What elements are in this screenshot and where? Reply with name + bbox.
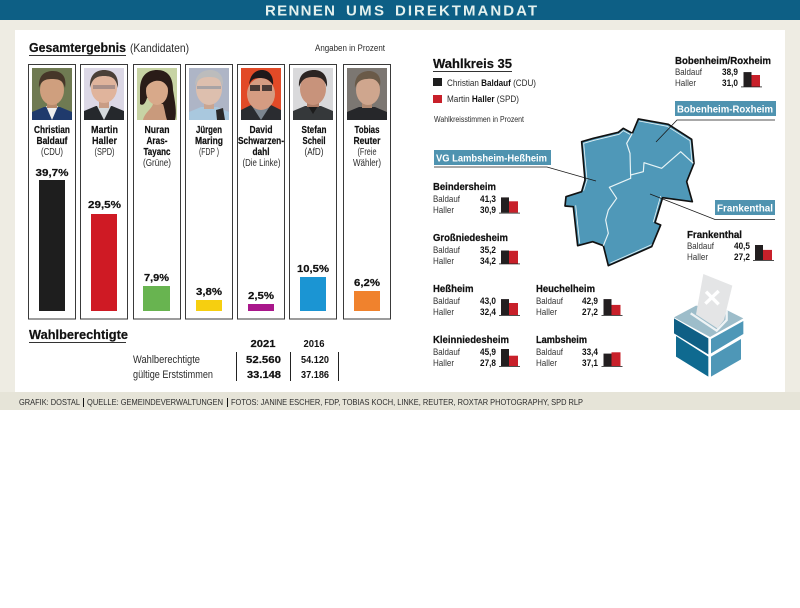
candidate card: Christian Baldauf: Baldauf <box>36 136 68 147</box>
photo: Christian Baldauf <box>32 68 72 120</box>
candidate card: Tobias Reuter: Wähler) <box>353 158 381 169</box>
data: Heuchelheim: Baldauf <box>536 296 563 307</box>
data: Kleinniedesheim: 45,9 <box>480 347 496 357</box>
data: Bobenheim/Roxheim <box>675 55 771 89</box>
table: eligible voters: 37.186 <box>301 370 329 381</box>
heading: Gesamtergebnis <box>29 40 189 56</box>
data: Kleinniedesheim: Kleinniedesheim <box>433 334 509 346</box>
map: Wahlkreis 35 <box>565 119 694 266</box>
candidate card: David Schwarzendahl: dahl <box>252 147 270 158</box>
data: Großniedesheim: Haller <box>433 256 454 267</box>
footer credits: FOTOS: JANINE ESCHER, FDP, TOBIAS KOCH, LINKE, REUTER, ROXTAR PHOTOGRAPHY, SPD RLP <box>231 397 583 407</box>
candidate card: Nuran Aras-Tayanc: Tayanc <box>144 147 171 158</box>
header bar: RENNEN <box>265 2 335 20</box>
candidate card: Nuran Aras-Tayanc: Aras- <box>146 136 168 147</box>
candidate card: Jürgen Maring: Jürgen <box>196 125 222 136</box>
data: Kleinniedesheim: Baldauf <box>433 347 460 358</box>
data: Frankenthal <box>687 229 774 263</box>
candidate card: Martin Haller: 29,5% <box>88 199 122 211</box>
data: Frankenthal: Frankenthal <box>687 229 742 241</box>
candidate card: Stefan Scheil: 10,5% <box>297 263 330 275</box>
candidate card: Christian Baldauf: 39,7% <box>36 167 69 179</box>
data: Beindersheim: Baldauf <box>433 194 460 205</box>
data: Heßheim: 43,0 <box>480 296 496 306</box>
data: Beindersheim: Beindersheim <box>433 181 496 193</box>
candidate card: Christian Baldauf <box>28 64 76 319</box>
label: VG Lambsheim-Heßheim <box>434 150 596 181</box>
label: Bobenheim-Roxheim <box>656 101 776 142</box>
data: Lambsheim <box>536 334 622 369</box>
data: Heuchelheim: 42,9 <box>582 296 598 306</box>
data: Heßheim: Haller <box>433 307 454 318</box>
data: Lambsheim: Lambsheim <box>536 334 587 346</box>
footer credits: GRAFIK: DOSTAL <box>19 397 80 407</box>
candidate card: David Schwarzendahl: Schwarzen- <box>238 136 284 147</box>
candidate card: Martin Haller: Martin <box>91 125 118 136</box>
candidate card: Nuran Aras-Tayanc: Nuran <box>144 125 170 136</box>
data: Heuchelheim: Heuchelheim <box>536 283 595 295</box>
label: Frankenthal: Frankenthal <box>717 202 773 214</box>
header bar: UMS <box>346 2 384 20</box>
photo: Nuran Aras-Tayanc <box>137 68 177 120</box>
heading: Gesamtergebnis: (Kandidaten) <box>130 41 189 55</box>
data: Bobenheim/Roxheim: 38,9 <box>722 67 738 77</box>
white main panel <box>15 30 785 392</box>
data: Heßheim: Baldauf <box>433 296 460 307</box>
data: Heßheim: 32,4 <box>480 307 496 317</box>
data: Beindersheim: Haller <box>433 205 454 216</box>
data: Heuchelheim <box>536 283 622 318</box>
table: eligible voters: 54.120 <box>301 355 329 366</box>
candidate card: Tobias Reuter: (Freie <box>358 147 377 158</box>
header bar <box>0 0 800 20</box>
table: eligible voters: 33.148 <box>247 369 281 381</box>
candidate card: Stefan Scheil: Scheil <box>302 136 326 147</box>
label: Frankenthal <box>650 194 775 220</box>
table: eligible voters: 52.560 <box>246 354 281 366</box>
note: Wahlkreisstimmen in Prozent: Wahlkreisstimmen in Prozent <box>434 115 525 124</box>
data: Kleinniedesheim <box>433 334 520 369</box>
data: Bobenheim/Roxheim: Bobenheim/Roxheim <box>675 55 771 67</box>
candidate card: Christian Baldauf: Christian <box>34 125 70 136</box>
data: Bobenheim/Roxheim: Baldauf <box>675 67 702 78</box>
data: Frankenthal: Baldauf <box>687 241 714 252</box>
candidate card: David Schwarzendahl <box>238 64 284 319</box>
data: Bobenheim/Roxheim: Haller <box>675 78 696 89</box>
data: Heuchelheim: 27,2 <box>582 307 598 317</box>
candidate card: Jürgen Maring: 3,8% <box>196 286 223 298</box>
candidate card: Tobias Reuter: 6,2% <box>354 277 381 289</box>
legend: Christian Baldauf (CDU) <box>447 78 536 89</box>
candidate card: Stefan Scheil: Stefan <box>302 125 326 136</box>
photo: Jürgen Maring <box>189 68 229 120</box>
footer credits <box>0 392 800 410</box>
candidate card: Stefan Scheil: (AfD) <box>304 147 324 158</box>
data: Lambsheim: 33,4 <box>582 347 598 357</box>
candidate card: Martin Haller: (SPD) <box>94 147 114 158</box>
legend: Martin Haller (SPD) <box>447 94 519 105</box>
candidate card: David Schwarzendahl: 2,5% <box>248 290 275 302</box>
data: Großniedesheim: Baldauf <box>433 245 460 256</box>
candidate card: Jürgen Maring <box>186 64 232 319</box>
note: Angaben in Prozent: Angaben in Prozent <box>315 43 385 53</box>
heading: Wahlberechtigte: Wahlberechtigte <box>29 327 128 342</box>
candidate card: Tobias Reuter: Tobias <box>354 125 380 136</box>
label: Bobenheim-Roxheim: Bobenheim-Roxheim <box>677 104 773 116</box>
candidate card: Jürgen Maring: Maring <box>195 136 223 147</box>
table: eligible voters: 2016 <box>304 339 325 350</box>
data: Bobenheim/Roxheim: 31,0 <box>722 78 738 88</box>
candidate card: Nuran Aras-Tayanc: 7,9% <box>144 272 170 284</box>
candidate card: David Schwarzendahl: David <box>250 125 272 136</box>
photo: Stefan Scheil <box>293 68 333 120</box>
data: Großniedesheim: Großniedesheim <box>433 232 508 244</box>
heading: Wahlkreis 35: Wahlkreis 35 <box>433 57 512 71</box>
data: Heßheim <box>433 283 520 318</box>
candidate card: Nuran Aras-Tayanc: (Grüne) <box>143 158 171 169</box>
data: Lambsheim: 37,1 <box>582 358 598 368</box>
data: Beindersheim <box>433 181 520 216</box>
data: Lambsheim: Baldauf <box>536 347 563 358</box>
data: Beindersheim: 30,9 <box>480 205 496 215</box>
photo: Tobias Reuter <box>347 68 387 120</box>
label: VG Lambsheim-Heßheim: VG Lambsheim-Heßheim <box>436 152 547 164</box>
header bar: DIREKTMANDAT <box>395 2 537 20</box>
data: Großniedesheim: 35,2 <box>480 245 496 255</box>
data: Großniedesheim <box>433 232 520 267</box>
data: Großniedesheim: 34,2 <box>480 256 496 266</box>
footer credits: QUELLE: GEMEINDEVERWALTUNGEN <box>87 397 223 407</box>
candidate card: Martin Haller <box>80 64 128 319</box>
heading: Gesamtergebnis: Gesamtergebnis <box>29 40 126 55</box>
candidate card: Tobias Reuter: Reuter <box>354 136 381 147</box>
table: eligible voters: 2021 <box>250 338 276 350</box>
data: Kleinniedesheim: Haller <box>433 358 454 369</box>
data: Frankenthal: 27,2 <box>734 252 750 262</box>
candidate card: Martin Haller: Haller <box>92 136 117 147</box>
data: Heßheim: Heßheim <box>433 283 474 295</box>
icon: ballot box <box>674 274 743 377</box>
data: Frankenthal: Haller <box>687 252 708 263</box>
photo: Martin Haller <box>84 68 124 120</box>
data: Beindersheim: 41,3 <box>480 194 496 204</box>
data: Kleinniedesheim: 27,8 <box>480 358 496 368</box>
candidate card: Christian Baldauf: (CDU) <box>41 147 63 158</box>
table: eligible voters: Wahlberechtigte <box>133 354 200 366</box>
candidate card: David Schwarzendahl: (Die Linke) <box>242 158 280 169</box>
data: Lambsheim: Haller <box>536 358 557 369</box>
candidate card: Jürgen Maring: (FDP ) <box>199 147 219 158</box>
candidate card: Stefan Scheil <box>290 64 336 319</box>
table: eligible voters <box>133 338 339 381</box>
candidate card: Nuran Aras-Tayanc <box>134 64 180 319</box>
candidate card: Tobias Reuter <box>344 64 390 319</box>
data: Heuchelheim: Haller <box>536 307 557 318</box>
data: Frankenthal: 40,5 <box>734 241 750 251</box>
legend <box>433 78 536 105</box>
table: eligible voters: gültige Erststimmen <box>133 369 213 381</box>
photo: David Schwarzendahl <box>241 68 281 120</box>
